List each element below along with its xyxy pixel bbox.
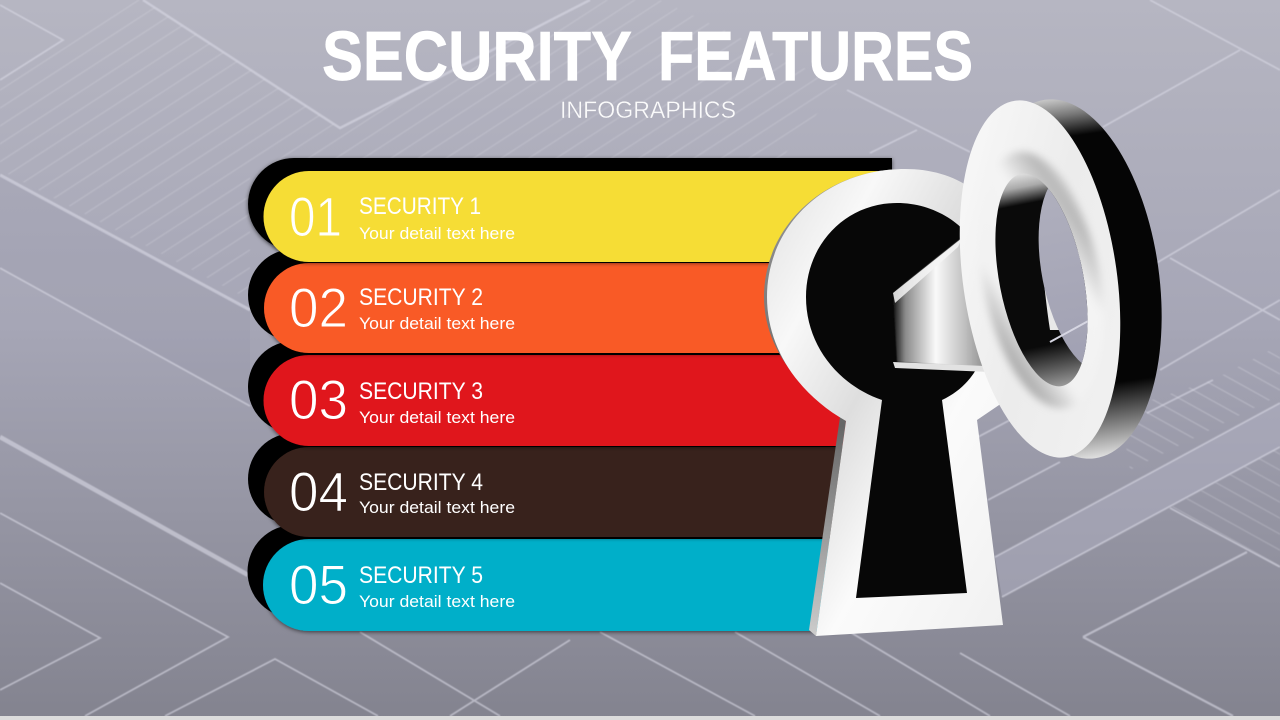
ring see-through	[1038, 188, 1088, 363]
ring back rim	[957, 87, 1183, 471]
subtitle: INFOGRAPHICS	[560, 97, 736, 124]
item 2: Your detail text here	[359, 314, 515, 333]
item 3: 03	[289, 368, 348, 431]
item 2: 02	[289, 276, 348, 339]
panel: security list	[248, 158, 892, 631]
item 5	[248, 525, 860, 631]
item 4: SECURITY 4	[359, 469, 483, 496]
keyhole face	[767, 169, 1026, 636]
ring hole wall	[980, 166, 1103, 394]
item 5: Your detail text here	[359, 592, 515, 611]
ring front face	[939, 90, 1141, 468]
keyhole opening	[806, 203, 992, 598]
item 1	[248, 158, 892, 262]
title	[322, 17, 973, 95]
title: SECURITY	[322, 17, 632, 95]
item 5: 05	[289, 553, 348, 616]
keyhole side bevel	[764, 169, 905, 636]
icon: key ring	[960, 100, 1162, 459]
item 2	[248, 249, 860, 353]
item 2: SECURITY 2	[359, 284, 483, 311]
title: FEATURES	[658, 17, 973, 95]
item 4: 04	[289, 460, 348, 523]
icon: key shaft	[893, 238, 995, 372]
item 1: Your detail text here	[359, 224, 515, 243]
item 1: SECURITY 1	[359, 193, 481, 220]
item 3	[248, 341, 860, 446]
icon: keyhole plate	[764, 169, 1026, 636]
item 4: Your detail text here	[359, 498, 515, 517]
ring shading	[960, 141, 1123, 419]
item 1: 01	[289, 185, 342, 248]
item 4	[248, 433, 860, 537]
item 5: SECURITY 5	[359, 562, 483, 589]
item 3: Your detail text here	[359, 408, 515, 427]
item 3: SECURITY 3	[359, 378, 483, 405]
